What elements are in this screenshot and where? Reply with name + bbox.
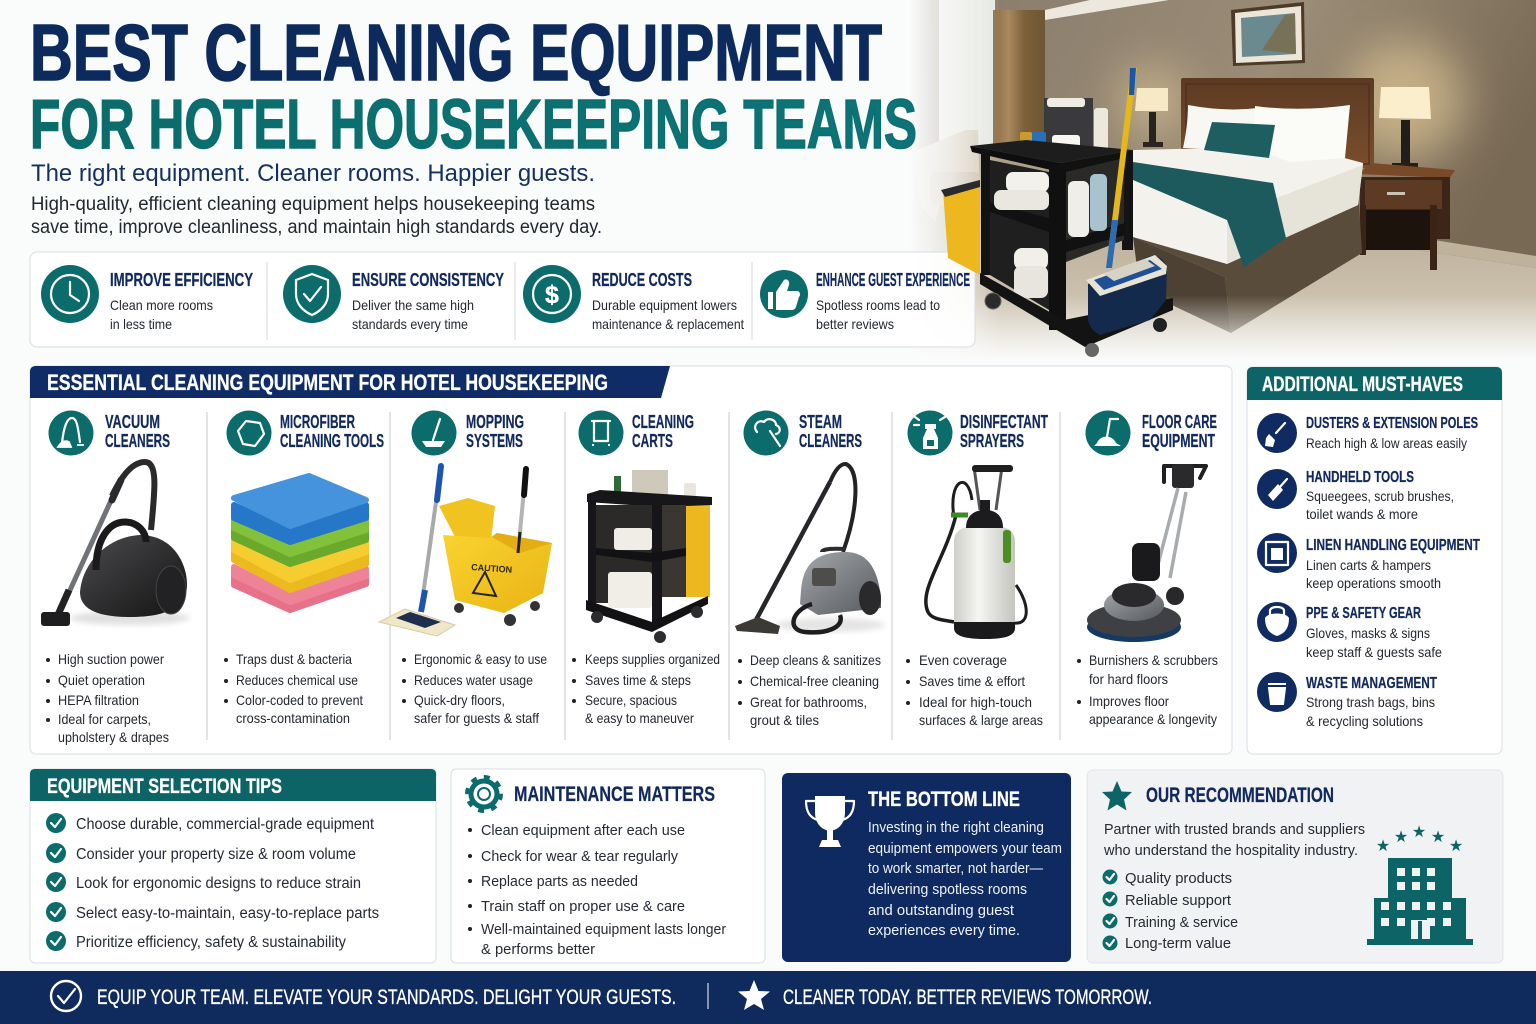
panel: equipment selection tips	[30, 769, 436, 963]
steam bullets	[740, 652, 881, 728]
benefit: improve efficiency: Clean more rooms	[110, 297, 213, 313]
recommendation checklist	[1102, 870, 1238, 952]
panel: maintenance matters: MAINTENANCE MATTERS	[514, 783, 715, 806]
section heading: ESSENTIAL CLEANING EQUIPMENT FOR HOTEL HOUSEKEEPING	[47, 370, 608, 395]
vacuum bullets	[48, 651, 169, 745]
icon: check	[51, 981, 81, 1011]
column: cleaning carts: CLEANING	[632, 412, 694, 432]
title: BEST CLEANING EQUIPMENT	[30, 8, 882, 97]
column: cleaning carts: CARTS	[632, 431, 673, 451]
maintenance list: Train staff on proper use & care	[481, 898, 685, 915]
mop bullets: Ergonomic & easy to use	[414, 651, 547, 667]
column: steam cleaners: STEAM	[799, 412, 842, 432]
tip list: Select easy-to-maintain, easy-to-replace parts	[76, 905, 379, 922]
column: microfiber tools: MICROFIBER	[280, 412, 355, 432]
column: disinfectant sprayers: SPRAYERS	[960, 431, 1024, 451]
item: ppe and safety: Gloves, masks & signs	[1306, 625, 1430, 641]
benefit: reduce costs: Durable equipment lowers	[592, 297, 737, 313]
bottom line text: to work smarter, not harder—	[868, 861, 1043, 877]
benefit: reduce costs: $	[545, 281, 559, 309]
cart illustration	[586, 470, 712, 643]
mop and bucket illustration: CAUTION	[471, 562, 512, 575]
cart bullets: & easy to maneuver	[585, 710, 694, 726]
benefit: ensure consistency	[283, 265, 504, 332]
icon: floor machine	[1086, 410, 1130, 456]
column: disinfectant sprayers: DISINFECTANT	[960, 412, 1048, 432]
tip list	[76, 816, 379, 951]
icon: hotel with stars: ★	[1412, 824, 1426, 841]
recommendation checklist: Training & service	[1125, 914, 1238, 931]
vacuum illustration	[41, 462, 190, 626]
nightstand	[1357, 163, 1455, 270]
column: vacuum cleaners: CLEANERS	[105, 431, 170, 451]
panel: additional must-haves	[1247, 367, 1502, 754]
bottom line text: equipment empowers your team	[868, 841, 1062, 857]
icon: gear	[467, 777, 501, 811]
mop bullets	[404, 651, 547, 726]
floor care bullets: Burnishers & scrubbers	[1089, 652, 1218, 668]
cart bullets	[574, 651, 720, 726]
item: linen handling: Linen carts & hampers	[1306, 557, 1431, 573]
item: waste management: & recycling solutions	[1306, 713, 1423, 729]
mop bullets: Quick-dry floors,	[414, 692, 505, 708]
footer banner: EQUIP YOUR TEAM. ELEVATE YOUR STANDARDS. DELIGHT YOUR GUESTS.	[97, 986, 676, 1009]
benefit: ensure consistency: standards every time	[352, 316, 468, 332]
icon: hotel with stars: ★	[1449, 838, 1463, 855]
tips heading: EQUIPMENT SELECTION TIPS	[47, 775, 282, 798]
benefit: guest experience: Spotless rooms lead to	[816, 297, 940, 313]
sprayer illustration	[926, 465, 1026, 639]
right lamp	[1379, 87, 1431, 170]
floor machine illustration	[1087, 464, 1206, 642]
must-haves heading	[1247, 367, 1502, 400]
icon: cart	[578, 410, 624, 456]
benefits strip	[30, 252, 975, 347]
subtitle: The right equipment. Cleaner rooms. Happier guests.	[31, 160, 595, 187]
bottom line text: and outstanding guest	[868, 903, 1014, 919]
housekeeping cart in photo	[941, 68, 1173, 357]
benefit: guest experience: ENHANCE GUEST EXPERIENCE	[816, 270, 970, 290]
column: floor care equipment: FLOOR CARE	[1142, 412, 1217, 432]
must-haves heading: ADDITIONAL MUST-HAVES	[1262, 373, 1463, 396]
bottom line text: delivering spotless rooms	[868, 882, 1027, 898]
benefit: reduce costs: maintenance & replacement	[592, 316, 744, 332]
vacuum bullets: High suction power	[58, 651, 164, 667]
mop bullets: Reduces water usage	[414, 672, 533, 688]
benefit: improve efficiency: in less time	[110, 316, 172, 332]
sprayer bullets: Ideal for high-touch	[919, 694, 1032, 710]
mop bullets: safer for guests & staff	[414, 710, 539, 726]
item: handheld tools	[1257, 469, 1454, 522]
bottom line text	[868, 820, 1062, 939]
tip list: Look for ergonomic designs to reduce strain	[76, 875, 361, 892]
icon: vacuum	[48, 410, 94, 456]
item: waste management: WASTE MANAGEMENT	[1306, 675, 1437, 692]
headboard	[1181, 78, 1374, 168]
bottom line text: Investing in the right cleaning	[868, 820, 1044, 836]
benefit: ensure consistency: ENSURE CONSISTENCY	[352, 270, 504, 290]
sprayer bullets: Saves time & effort	[919, 673, 1025, 689]
tip list: Choose durable, commercial-grade equipment	[76, 816, 375, 833]
bottom line text: experiences every time.	[868, 923, 1020, 939]
hotel room photo	[880, 0, 1536, 360]
intro text: save time, improve cleanliness, and maintain high standards every day.	[31, 217, 602, 238]
intro text	[31, 194, 602, 238]
tip list: Consider your property size & room volume	[76, 846, 356, 863]
steam cleaner illustration	[735, 464, 885, 634]
item: dusters	[1257, 413, 1478, 453]
column: microfiber tools	[226, 410, 384, 726]
item: waste management	[1257, 672, 1437, 729]
column: vacuum cleaners	[41, 410, 190, 745]
column: mopping systems	[379, 410, 552, 726]
recommendation text	[1103, 821, 1365, 859]
maintenance list	[470, 822, 726, 958]
panel: the bottom line	[782, 773, 1071, 962]
sprayer bullets: surfaces & large areas	[919, 712, 1043, 728]
maintenance list: Replace parts as needed	[481, 873, 638, 890]
benefit: reduce costs	[523, 265, 744, 332]
item: handheld tools: Squeegees, scrub brushes,	[1306, 488, 1454, 504]
steam bullets: grout & tiles	[750, 712, 819, 728]
recommendation text: who understand the hospitality industry.	[1103, 842, 1358, 859]
item: handheld tools: HANDHELD TOOLS	[1306, 469, 1414, 486]
column: mopping systems: MOPPING	[466, 412, 524, 432]
left lamp	[1135, 88, 1168, 147]
item: linen handling	[1257, 533, 1480, 591]
microfiber bullets: Color-coded to prevent	[236, 692, 363, 708]
maintenance list: Well-maintained equipment lasts longer	[481, 921, 726, 938]
item: handheld tools: toilet wands & more	[1306, 506, 1418, 522]
icon: trophy	[806, 796, 854, 847]
column: cleaning carts	[574, 410, 720, 726]
item: dusters: Reach high & low areas easily	[1306, 435, 1467, 451]
icon: star	[1102, 781, 1132, 810]
cart bullets: Keeps supplies organized	[585, 651, 720, 667]
title	[30, 8, 917, 163]
icon: hotel with stars: ★	[1376, 838, 1390, 855]
benefit: improve efficiency: IMPROVE EFFICIENCY	[110, 270, 253, 290]
column: floor care equipment: EQUIPMENT	[1142, 431, 1215, 451]
item: linen handling: LINEN HANDLING EQUIPMENT	[1306, 537, 1480, 554]
bed skirt	[1133, 203, 1362, 333]
mop and bucket illustration	[379, 466, 552, 636]
microfiber bullets: Reduces chemical use	[236, 672, 358, 688]
floor care bullets: for hard floors	[1089, 671, 1168, 687]
vacuum bullets: Ideal for carpets,	[58, 711, 151, 727]
vacuum bullets: Quiet operation	[58, 672, 145, 688]
column: mopping systems: SYSTEMS	[466, 431, 523, 451]
intro text: High-quality, efficient cleaning equipment helps housekeeping teams	[31, 194, 595, 215]
column: microfiber tools: CLEANING TOOLS	[280, 431, 384, 451]
floor care bullets: Improves floor	[1089, 693, 1169, 709]
icon: microfiber cloth	[226, 410, 272, 456]
recommendation checklist: Long-term value	[1125, 935, 1231, 952]
icon: star	[738, 980, 770, 1010]
microfiber bullets: cross-contamination	[236, 710, 350, 726]
steam bullets: Chemical-free cleaning	[750, 673, 879, 689]
panel: our recommendation: OUR RECOMMENDATION	[1146, 784, 1334, 807]
item: ppe and safety: PPE & SAFETY GEAR	[1306, 605, 1421, 622]
bed mattress	[1133, 146, 1363, 264]
maintenance list: Check for wear & tear regularly	[481, 848, 678, 865]
icon: hotel with stars: ★	[1394, 829, 1408, 846]
panel: essential equipment	[30, 366, 1232, 754]
steam bullets: Deep cleans & sanitizes	[750, 652, 881, 668]
cart bullets: Saves time & steps	[585, 672, 691, 688]
panel: our recommendation	[1087, 770, 1503, 963]
benefit: reduce costs: REDUCE COSTS	[592, 270, 692, 290]
armchair	[913, 130, 980, 222]
footer banner: CLEANER TODAY. BETTER REVIEWS TOMORROW.	[783, 986, 1152, 1009]
cart bullets: Secure, spacious	[585, 692, 677, 708]
sprayer bullets	[908, 652, 1043, 728]
recommendation checklist: Reliable support	[1125, 892, 1232, 909]
sprayer bullets: Even coverage	[919, 652, 1007, 668]
picture frame	[1231, 2, 1305, 66]
floor care bullets	[1079, 652, 1218, 727]
benefit: ensure consistency: Deliver the same high	[352, 297, 474, 313]
tip checks	[46, 813, 66, 951]
microfiber bullets: Traps dust & bacteria	[236, 651, 352, 667]
column: steam cleaners: CLEANERS	[799, 431, 862, 451]
panel: maintenance matters	[451, 769, 765, 963]
vacuum bullets: HEPA filtration	[58, 692, 139, 708]
vacuum bullets: upholstery & drapes	[58, 729, 169, 745]
column: floor care equipment	[1079, 410, 1218, 727]
steam bullets: Great for bathrooms,	[750, 694, 867, 710]
benefit: guest experience	[760, 270, 970, 332]
benefit: improve efficiency	[41, 265, 253, 332]
tip list: Prioritize efficiency, safety & sustainability	[76, 934, 346, 951]
title: FOR HOTEL HOUSEKEEPING TEAMS	[30, 85, 917, 163]
recommendation checklist: Quality products	[1125, 870, 1232, 887]
column: steam cleaners	[735, 410, 885, 728]
tips heading	[30, 769, 436, 801]
bed runner	[1133, 162, 1286, 267]
microfiber bullets	[226, 651, 363, 726]
floor care bullets: appearance & longevity	[1089, 711, 1217, 727]
icon: mop	[412, 410, 456, 456]
recommendation text: Partner with trusted brands and suppliers	[1104, 821, 1365, 838]
item: ppe and safety: keep staff & guests safe	[1306, 644, 1442, 660]
panel: the bottom line: THE BOTTOM LINE	[868, 788, 1020, 811]
towel stack illustration	[234, 476, 366, 610]
icon: steam	[744, 410, 788, 456]
maintenance list: Clean equipment after each use	[481, 822, 685, 839]
pillows	[1183, 105, 1350, 162]
column: disinfectant sprayers	[908, 410, 1048, 728]
benefit: guest experience: better reviews	[816, 316, 894, 332]
item: linen handling: keep operations smooth	[1306, 575, 1441, 591]
icon: hotel with stars: ★	[1431, 829, 1445, 846]
icon: spray bottle	[908, 410, 952, 456]
section heading	[30, 366, 670, 398]
column: vacuum cleaners: VACUUM	[105, 412, 160, 432]
item: ppe and safety	[1257, 602, 1442, 660]
footer banner	[0, 971, 1536, 1024]
icon: hotel with stars	[1367, 824, 1473, 945]
item: waste management: Strong trash bags, bins	[1306, 694, 1435, 710]
maintenance list: & performs better	[481, 941, 595, 958]
